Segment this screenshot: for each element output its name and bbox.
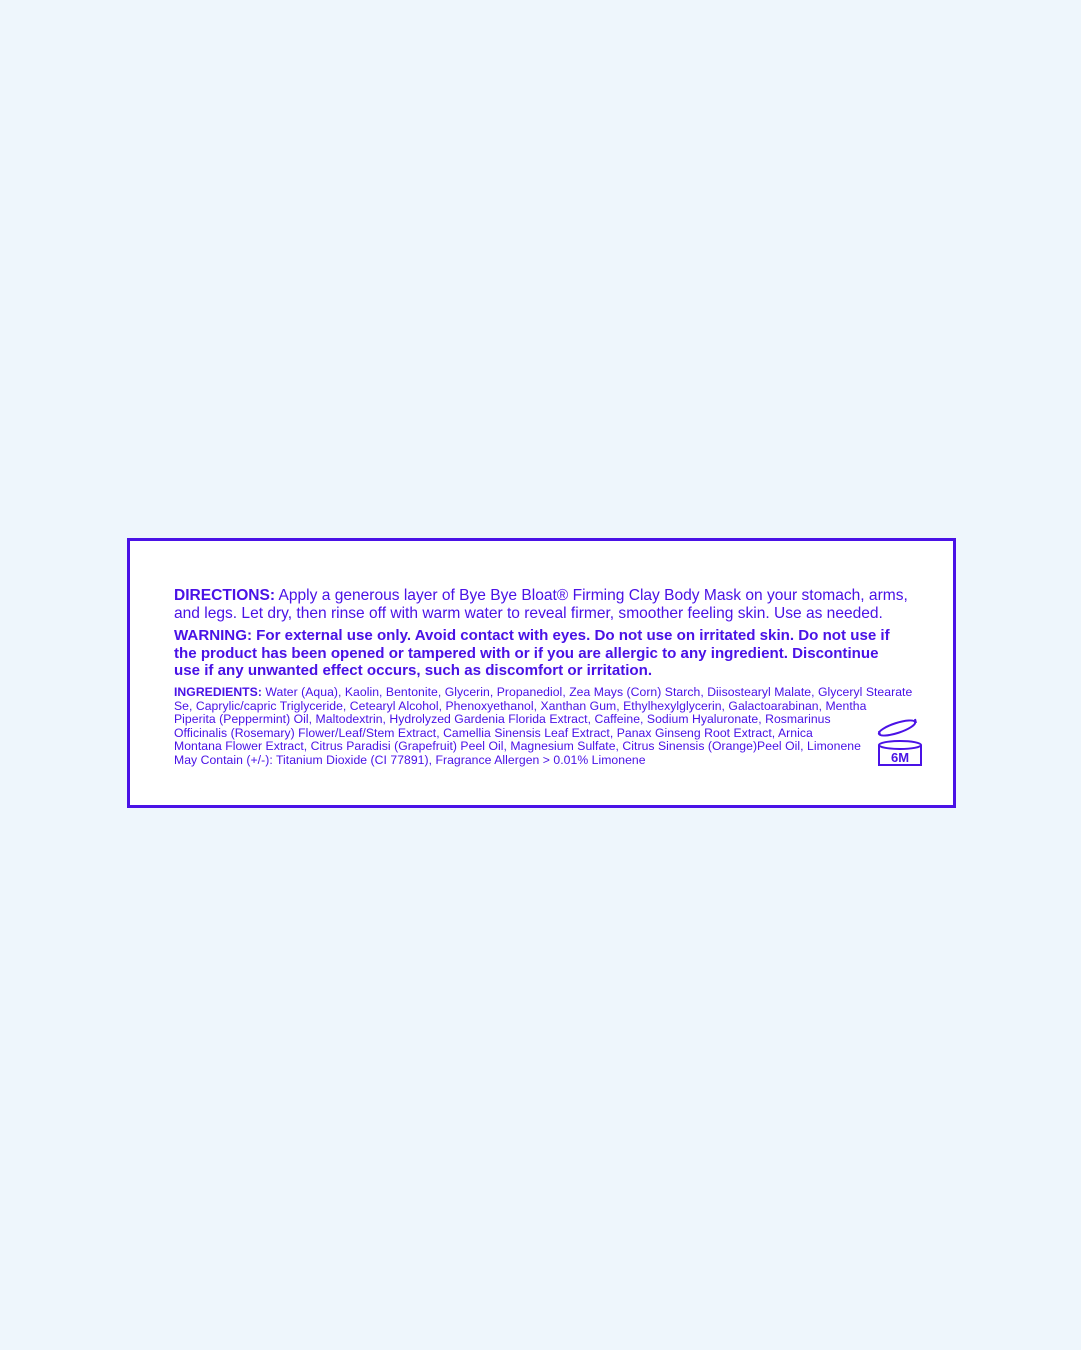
text: ingredients: Se, Caprylic/capric Triglyceride, Cetearyl Alcohol, Phenoxyethanol, Xanthan Gum, Ethylhexylglycerin, Galactoarabinan, Mentha	[174, 699, 866, 713]
text: ingredients: Montana Flower Extract, Citrus Paradisi (Grapefruit) Peel Oil, Magnesium Sulfate, Citrus Sinensis (Orange)Peel Oil, Limonene	[174, 739, 861, 753]
text: ingredients	[174, 685, 912, 767]
panel: label box	[127, 538, 956, 808]
text: directions	[174, 587, 908, 622]
icon: 6M open jar	[878, 718, 922, 766]
text: warning: WARNING: For external use only. Avoid contact with eyes. Do not use on irritated skin. Do not use if	[174, 627, 890, 644]
icon: 6M open jar: 6M	[891, 750, 909, 765]
text: warning: use if any unwanted effect occurs, such as discomfort or irritation.	[174, 662, 652, 679]
text: directions: and legs. Let dry, then rinse off with warm water to reveal firmer, smoother feeling skin. Use as needed.	[174, 605, 883, 622]
text: directions: DIRECTIONS: Apply a generous layer of Bye Bye Bloat® Firming Clay Body Mask on your stomach, arms,	[174, 587, 908, 604]
text: warning	[174, 627, 890, 679]
text: warning: the product has been opened or tampered with or if you are allergic to any ingredient. Discontinue	[174, 644, 878, 662]
text: ingredients: May Contain (+/-): Titanium Dioxide (CI 77891), Fragrance Allergen > 0.01% Limonene	[174, 753, 646, 767]
text: ingredients: Officinalis (Rosemary) Flower/Leaf/Stem Extract, Camellia Sinensis Leaf Extract, Panax Ginseng Root Extract, Arnica	[174, 726, 813, 740]
text: ingredients: INGREDIENTS: Water (Aqua), Kaolin, Bentonite, Glycerin, Propanediol, Zea Mays (Corn) Starch, Diisostearyl Malate, Glyceryl Stearate	[174, 685, 912, 699]
text: ingredients: Piperita (Peppermint) Oil, Maltodextrin, Hydrolyzed Gardenia Florida Extract, Caffeine, Sodium Hyaluronate, Rosmarinus	[174, 712, 831, 726]
